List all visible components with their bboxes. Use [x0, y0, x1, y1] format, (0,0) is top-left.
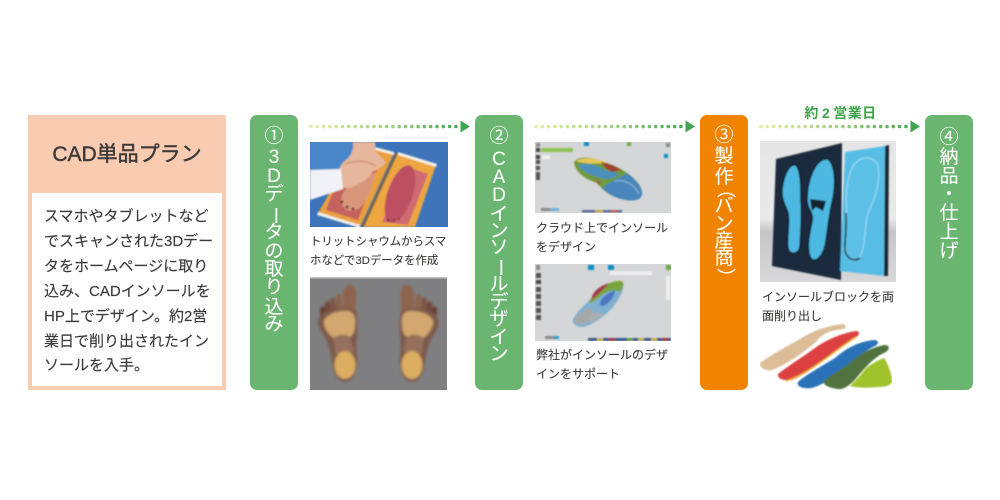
- step 2 label: イ: [489, 204, 508, 225]
- caption: cloud design: [536, 221, 668, 254]
- caption: 3D data creation: [310, 236, 446, 266]
- step 2 label: ソ: [489, 237, 508, 258]
- plan description: HP上でデザイン。約2営: [44, 308, 207, 325]
- caption: 3D data creation: トリットシャウムからスマ: [310, 236, 446, 248]
- caption: design support: インをサポート: [536, 366, 620, 380]
- step 4 label: ・: [939, 184, 958, 205]
- step 1 label: り: [264, 277, 284, 298]
- screenshot: design support: [535, 264, 671, 341]
- step 1 label: [264, 126, 285, 335]
- step 2 label: D: [492, 185, 506, 206]
- label: about 2 business days: 約 2 営業日: [804, 105, 877, 121]
- plan description: [44, 208, 213, 374]
- step 2 label: デ: [489, 292, 508, 313]
- step 3 label: [714, 124, 736, 286]
- caption: 3D data creation: ホなどで3Dデータを作成: [310, 254, 438, 266]
- step 3 label: ン: [714, 214, 734, 235]
- caption: milled on both sides: 面削り出し: [762, 308, 822, 322]
- step 2 label: ザ: [489, 309, 508, 330]
- plan description: でスキャンされた3Dデー: [44, 233, 213, 250]
- step 1 box: [250, 115, 298, 390]
- step 4 label: [939, 126, 958, 262]
- step 3 box: [700, 115, 748, 390]
- heading: CAD単品プラン: CAD単品プラン: [52, 143, 202, 166]
- step 2 box: [475, 115, 523, 390]
- step 1 label: 3: [269, 147, 279, 168]
- step 3 label: バ: [714, 196, 734, 217]
- photo: finished insoles: [760, 323, 892, 390]
- arrow: step 2 to step 3: [534, 120, 695, 132]
- step 3 label: 商: [714, 248, 734, 269]
- right foot: [400, 285, 439, 382]
- panel: plan summary: [28, 115, 226, 390]
- left foot: [318, 285, 357, 382]
- step 4 label: 上: [939, 222, 958, 243]
- step 1 label: ー: [264, 206, 285, 224]
- step 4 box: [925, 115, 973, 390]
- step 4 label: 納: [939, 147, 958, 168]
- step 1 label: ①: [264, 126, 284, 147]
- step 3 label: ）: [714, 268, 735, 286]
- screenshot: cloud CAD design: [535, 142, 671, 213]
- step 2 label: ル: [489, 274, 508, 295]
- step 4 label: げ: [939, 241, 958, 262]
- step 1 label: デ: [264, 184, 284, 205]
- step 4 label: 仕: [939, 203, 958, 224]
- photo: milled insole blocks: [760, 141, 896, 282]
- panel text block: [32, 193, 222, 386]
- step 2 label: ー: [489, 258, 510, 276]
- step 3 label: （: [714, 178, 735, 198]
- plan description: 込み、CADインソールを: [44, 283, 211, 300]
- step 4 label: ④: [939, 127, 958, 148]
- step 3 label: 作: [714, 167, 734, 188]
- photo: foot pressed in foam: [310, 142, 448, 227]
- caption: milled on both sides: [762, 290, 894, 322]
- step 2 label: [489, 126, 510, 365]
- caption: cloud design: をデザイン: [536, 240, 596, 254]
- caption: milled on both sides: インソールブロックを両: [762, 290, 894, 304]
- plan description: ソールを入手。: [44, 357, 149, 374]
- step 4 label: 品: [939, 166, 958, 187]
- plan description: 業日で削り出されたイン: [44, 333, 209, 350]
- step 1 label: 込: [264, 297, 284, 318]
- step 1 label: み: [264, 314, 284, 335]
- caption: cloud design: クラウド上でインソール: [536, 221, 668, 235]
- step 3 label: ③: [714, 125, 734, 146]
- step 2 label: イ: [489, 327, 508, 348]
- step 1 label: の: [264, 241, 284, 262]
- plan description: タをホームページに取り: [44, 258, 208, 275]
- caption: design support: [536, 348, 668, 380]
- plan description: スマホやタブレットなど: [44, 208, 209, 225]
- step 2 label: A: [493, 167, 505, 188]
- caption: design support: 弊社がインソールのデザ: [536, 348, 668, 362]
- step 2 label: ン: [489, 344, 508, 365]
- step 1 label: タ: [264, 222, 284, 243]
- photo: 3D foot scan: [310, 277, 447, 390]
- step 2 label: ン: [489, 221, 508, 242]
- step 1 label: D: [267, 166, 281, 187]
- step 2 label: C: [492, 149, 506, 170]
- arrow: step 3 to step 4: [759, 120, 920, 132]
- step 3 label: 製: [714, 146, 734, 167]
- arrow: step 1 to step 2: [309, 120, 470, 132]
- step 2 label: ②: [489, 126, 508, 147]
- step 1 label: 取: [264, 259, 284, 280]
- step 3 label: 産: [714, 231, 734, 252]
